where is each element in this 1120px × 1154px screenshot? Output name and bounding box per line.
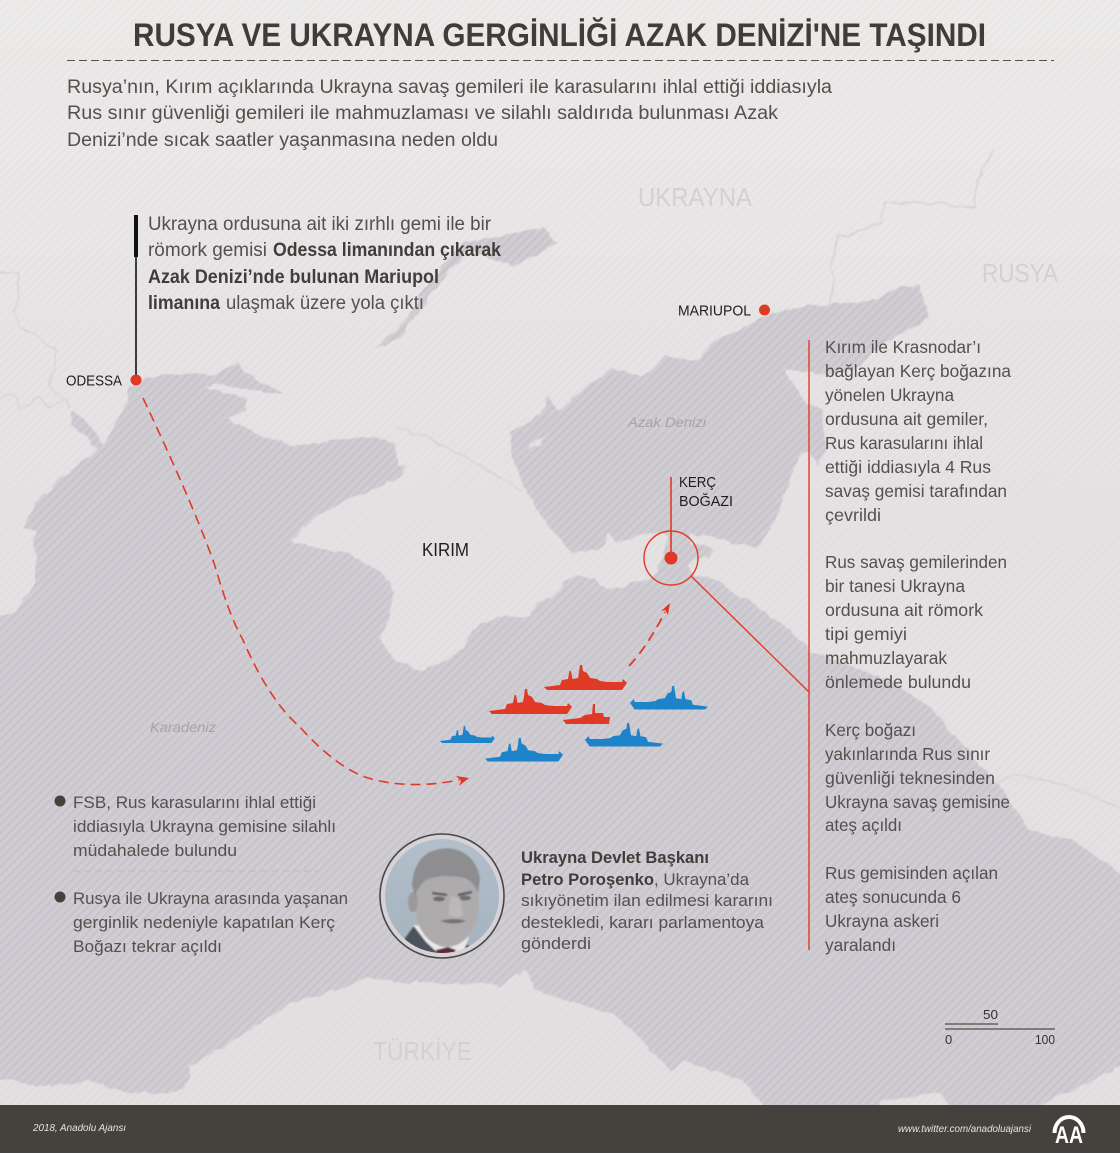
text column: events: yakınlarında Rus sınır [825, 744, 990, 764]
text column: events: yönelen Ukrayna [825, 385, 954, 405]
callout: Odessa departure: Odessa limanından çıkarak [273, 240, 501, 261]
marker: Mariupol: MARIUPOL [678, 302, 751, 320]
text column: events: Kırım ile Krasnodar’ı [825, 337, 981, 357]
text: Poroşenko statement: Petro Poroşenko [521, 870, 654, 889]
text column: events: ordusuna ait römork [825, 600, 983, 620]
footer bar: 2018, Anadolu Ajansı [32, 1122, 126, 1134]
callout: Odessa departure: Ukrayna ordusuna ait iki zırhlı gemi ile bir [148, 214, 492, 235]
bullet: FSB: iddiasıyla Ukrayna gemisine silahlı [73, 817, 336, 836]
map: country borders [0, 150, 1120, 807]
text column: events: Rus karasularını ihlal [825, 433, 983, 453]
ships: Russian vessels [489, 665, 627, 724]
sea labels: Azak Denizi [627, 414, 707, 430]
title: RUSYA VE UKRAYNA GERGİNLİĞİ AZAK DENİZİ'NE TAŞINDI [133, 17, 986, 53]
text column: events: önlemede bulundu [825, 672, 971, 692]
bullet: strait reopened: Boğazı tekrar açıldı [73, 937, 222, 956]
intro text: Denizi’nde sıcak saatler yaşanmasına neden oldu [67, 130, 498, 151]
callout: Odessa departure: Azak Denizi’nde bulunan Mariupol [148, 267, 439, 288]
text: Poroşenko statement [521, 848, 773, 953]
map: Black Sea, Sea of Azov and reservoirs [0, 220, 1120, 1105]
map scale [945, 1007, 1055, 1047]
text: Poroşenko statement: destekledi, kararı parlamentoya [521, 913, 765, 932]
text: Poroşenko statement: Ukrayna Devlet Başkanı [521, 848, 709, 867]
connector from strait to text column [691, 340, 809, 950]
text column: events: Kerç boğazı [825, 720, 916, 740]
callout: Odessa departure [136, 214, 501, 380]
text column: events: ettiği iddiasıyla 4 Rus [825, 457, 991, 477]
footer bar [0, 1105, 1120, 1153]
footer bar: www.twitter.com/anadoluajansi [898, 1123, 1032, 1135]
bullet: strait reopened [54, 889, 348, 956]
label: Kırım: KIRIM [422, 540, 469, 560]
arrow: route from Odessa [143, 398, 469, 786]
text column: events: bir tanesi Ukrayna [825, 576, 965, 596]
marker: Kerç Boğazı: KERÇ [679, 474, 716, 491]
text column: events: Rus gemisinden açılan [825, 863, 998, 883]
text column: events [825, 337, 1011, 955]
callout: Odessa departure: limanına [148, 293, 220, 314]
intro text [67, 77, 832, 151]
text column: events: ateş açıldı [825, 815, 902, 835]
intro text: Rus sınır güvenliği gemileri ile mahmuzlaması ve silahlı saldırıda bulunması Azak [67, 103, 779, 124]
text column: events: Rus savaş gemilerinden [825, 552, 1007, 572]
sea labels [150, 414, 707, 735]
footer bar: AA [1055, 1122, 1083, 1149]
country labels: RUSYA [982, 258, 1059, 288]
text column: events: tipi gemiyi [825, 624, 907, 644]
text column: events: Ukrayna askeri [825, 911, 939, 931]
map scale: 100 [1035, 1032, 1055, 1047]
text column: events: savaş gemisi tarafından [825, 481, 1007, 501]
country labels [373, 182, 1059, 1066]
arrow: route to the strait [629, 603, 670, 666]
text column: events: Ukrayna savaş gemisine [825, 792, 1010, 812]
text column: events: çevrildi [825, 505, 881, 525]
text column: events: mahmuzlayarak [825, 648, 947, 668]
text column: events: yaralandı [825, 935, 896, 955]
bullet: FSB: FSB, Rus karasularını ihlal ettiği [73, 793, 316, 812]
country labels: UKRAYNA [638, 182, 753, 212]
text: Poroşenko statement: , Ukrayna’da [654, 870, 750, 889]
marker: Odessa: ODESSA [66, 372, 122, 390]
intro text: Rusya’nın, Kırım açıklarında Ukrayna savaş gemileri ile karasularını ihlal ettiği iddiasıyla [67, 77, 832, 98]
text column: events: bağlayan Kerç boğazına [825, 361, 1011, 381]
sea labels: Karadeniz [150, 719, 216, 735]
marker: Kerç Boğazı [644, 474, 733, 585]
text column: events: ateş sonucunda 6 [825, 887, 961, 907]
text column: events: ordusuna ait gemiler, [825, 409, 988, 429]
bullet: strait reopened: gerginlik nedeniyle kapatılan Kerç [73, 913, 336, 932]
text: Poroşenko statement: gönderdi [521, 934, 591, 953]
bullet: FSB [54, 793, 336, 860]
text column: events: güvenliği teknesinden [825, 768, 995, 788]
map scale: 50 [983, 1007, 998, 1022]
country labels: TÜRKİYE [373, 1036, 472, 1066]
portrait: Petro Poroşenko [380, 834, 504, 960]
text: Poroşenko statement: sıkıyönetim ilan edilmesi kararını [521, 891, 773, 910]
bullet: strait reopened: Rusya ile Ukrayna arasında yaşanan [73, 889, 348, 908]
map scale: 0 [945, 1032, 952, 1047]
bullet: FSB: müdahalede bulundu [73, 841, 237, 860]
callout: Odessa departure: römork gemisi [148, 240, 267, 261]
callout: Odessa departure: ulaşmak üzere yola çıktı [226, 293, 424, 314]
ships: Ukrainian vessels [440, 686, 708, 762]
marker: Kerç Boğazı: BOĞAZI [679, 493, 733, 510]
